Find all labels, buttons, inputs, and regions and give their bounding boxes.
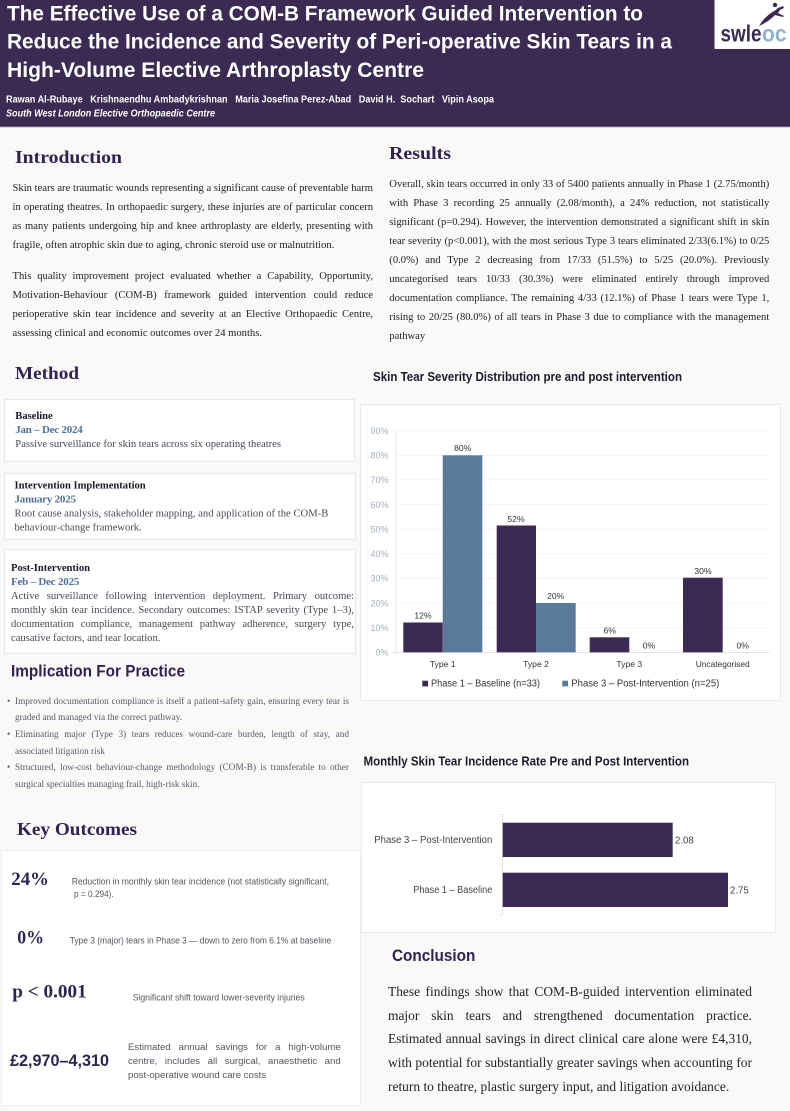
text block: introduction paragraph 2 [12,271,373,339]
legend: Phase 3 – Post-Intervention (n=25) [571,678,719,689]
category labels: Type 3 [616,659,642,669]
stat: 24% [11,869,329,899]
y axis labels: 80% [370,451,388,461]
y axis labels: 50% [370,524,388,534]
y axis labels: 60% [370,500,388,510]
panel: baseline: Passive surveillance for skin tears across six operating theatres [15,439,281,450]
stat: 24%: Reduction in monthly skin tear incidence (not statistically significant, [72,877,329,887]
chart title: monthly incidence: Monthly Skin Tear Incidence Rate Pre and Post Intervention [364,754,689,768]
stat: 0%: 0% [17,928,44,949]
affiliation: South West London Elective Orthopaedic Centre [6,108,215,120]
text block: post-intervention description: causative factors, and tear location. [11,633,160,644]
stat: p < 0.001: Significant shift toward lower-severity injuries [133,992,305,1002]
value labels: 6% [603,626,616,636]
logo: swleoc [714,0,790,49]
text block: introduction paragraph 2: This quality improvement project evaluated whether a Capability, Opportunity, [12,271,373,282]
y axis labels [370,426,388,658]
panel: intervention implementation: behaviour-change framework. [14,522,142,533]
value labels: 30% [694,566,712,576]
heading: Key Outcomes: Key Outcomes [17,819,137,839]
text block: implications list [7,696,349,790]
stat: 0%: Type 3 (major) tears in Phase 3 — down to zero from 6.1% at baseline [70,936,331,946]
text block: results: pathway [389,331,425,342]
text block: savings description [128,1042,341,1081]
text block: conclusion: These findings show that COM-B-guided intervention eliminated [388,984,752,999]
bar chart: monthly incidence: 2.08 [675,836,694,846]
panel: post-intervention [4,550,356,654]
bar chart: monthly incidence: 2.75 [730,886,749,896]
bar chart: monthly incidence: Phase 1 – Baseline [413,885,493,896]
text block: results: documentation compliance. The remaining 4/33 (12.1%) of Phase 1 tears were Type 1, [389,293,769,304]
value labels: 80% [454,443,472,453]
value labels [414,443,749,651]
text block: savings description: Estimated annual savings for a high-volume [128,1042,341,1053]
y axis labels: 70% [370,475,388,485]
text block: introduction paragraph 1: as many patients undergoing hip and knee arthroplasty are elderly, presenting with [12,221,373,232]
text block: introduction paragraph 1: fragile, often atrophic skin due to aging, chronic steroid use or malnutrition. [12,240,334,251]
text block: results [389,179,770,342]
bar chart: severity distribution [360,404,780,700]
text: • [7,696,10,706]
value labels: 20% [547,591,565,601]
text block: implications list: surgical specialties managing frail, high-risk skin. [15,780,200,790]
text block: results: significant (p=0.294). However, the intervention demonstrated a significant shift in skin [389,217,769,228]
value labels: 0% [643,641,656,651]
text block: introduction paragraph 1 [12,183,373,251]
value labels: 12% [414,611,432,621]
heading: Results: Results [389,143,451,163]
heading: Conclusion: Conclusion [392,947,475,965]
y axis labels: 0% [375,648,388,658]
stat: 0% [17,928,331,949]
value labels: 0% [736,641,749,651]
stat: savings: £2,970–4,310 [10,1051,109,1070]
text block: conclusion: return to theatre, plastic surgery input, and litigation avoidance. [388,1079,729,1094]
title: The Effective Use of a COM-B Framework Guided Intervention to [7,2,643,26]
authors: Rawan Al-Rubaye Krishnaendhu Ambadykrishnan Maria Josefina Perez-Abad David H. Sochart Vipin Asopa [6,94,494,106]
text block: post-intervention description [11,591,354,644]
stat: 24%: p = 0.294). [74,889,114,899]
text block: introduction paragraph 1: in operating theatres. In orthopaedic surgery, these injuries are of particular concern [12,202,373,213]
text block: introduction paragraph 1: Skin tears are traumatic wounds representing a significant cause of preventable harm [12,183,373,194]
text block: results: tear severity (p<0.001), with the most serious Type 3 tears eliminated 2/33(6.1%) to 0/25 [389,236,769,247]
text block: conclusion: Estimated annual savings in direct clinical care alone were £4,310, [388,1031,752,1046]
bars: phase 3 [443,455,576,652]
heading: Implication For Practice: Implication For Practice [11,662,185,681]
y axis labels: 90% [370,426,388,436]
chart title: severity distribution: Skin Tear Severity Distribution pre and post intervention [373,370,682,384]
category labels: Uncategorised [696,659,750,669]
logo: swleoc: oc [762,21,787,47]
panel: baseline [4,400,354,462]
stat: p < 0.001 [12,981,305,1002]
text block: results: with Phase 3 recording 25 annually (2.08/month), a 24% reduction, not statistically [389,198,769,209]
text block: results: rising to 20/25 (80.0%) of all tears in Phase 3 due to compliance with the management [389,312,769,323]
panel: key outcomes [2,850,360,1106]
y axis labels: 40% [370,549,388,559]
text block: implications list: Structured, low-cost behaviour-change methodology (COM-B) is transferable to other [15,763,349,773]
text block: implications list: associated litigation risk [15,747,105,757]
y axis labels: 30% [370,574,388,584]
text block: introduction paragraph 2: assessing clinical and economic outcomes over 24 months. [12,328,262,339]
legend [422,678,719,689]
text block: results: (0.0%) and Type 2 decreasing from 17/33 (51.5%) to 5/25 (20.0%). Previously [389,255,769,266]
panel: intervention implementation: January 2025 [14,493,76,505]
panel: baseline: Jan – Dec 2024 [15,424,83,436]
text block: implications list: Eliminating major (Type 3) tears reduces wound-care burden, length of stay, and [15,730,349,740]
text block: conclusion: major skin tears and strengthened documentation practice. [388,1008,752,1023]
text block: introduction paragraph 2: Motivation-Behaviour (COM-B) framework guided intervention could reduce [12,290,373,301]
title: Reduce the Incidence and Severity of Peri-operative Skin Tears in a [7,30,672,54]
panel: post-intervention: Feb – Dec 2025 [11,576,80,588]
text block: conclusion [388,984,752,1094]
legend: Phase 1 – Baseline (n=33) [431,678,540,689]
text block: post-intervention description: monthly skin tear incidence. Secondary outcomes: ISTAP severity (Type 1–3), [11,605,354,616]
text block: post-intervention description: documentation compliance, management pathway adherence, surgery type, [11,619,354,630]
text block: savings description: centre, includes all surgical, anaesthetic and [128,1056,341,1067]
text block: results: uncategorised tears 10/33 (30.3%) were eliminated entirely through improved [389,274,769,285]
text: • [7,763,10,773]
value labels: 52% [507,514,525,524]
title [7,2,672,82]
stat: 24%: 24% [11,869,49,890]
bar chart: monthly incidence [362,782,776,932]
text: • [7,730,10,740]
category labels: Type 1 [430,659,456,669]
text block: results: Overall, skin tears occurred in only 33 of 5400 patients annually in Phase 1 (2.75/month) [389,179,769,190]
bar chart: monthly incidence: Phase 3 – Post-Intervention [374,835,492,846]
y axis labels: 10% [370,623,388,633]
logo: swleoc: swle [720,21,762,47]
y axis labels: 20% [370,598,388,608]
header banner [0,0,790,128]
stat: p < 0.001: p < 0.001 [12,981,87,1002]
text block: conclusion: with potential for substantially greater savings when accounting for [388,1055,752,1070]
panel: intervention implementation: Intervention Implementation [14,480,146,491]
panel: intervention implementation [4,474,356,540]
bars: phase 1 [403,526,723,652]
panel: baseline: Baseline [15,411,53,422]
text block: savings description: post-operative wound care costs [128,1070,266,1081]
panel: intervention implementation: Root cause analysis, stakeholder mapping, and application of the COM-B [14,508,328,519]
panel: post-intervention: Post-Intervention [11,563,90,574]
title: High-Volume Elective Arthroplasty Centre [7,59,424,82]
heading: Introduction: Introduction [15,147,122,167]
text block: implications list: Improved documentation compliance is itself a patient-safety gain, ensuring every tear is [15,696,349,706]
text block: introduction paragraph 2: perioperative skin tear incidence and severity at an Elective Orthopaedic Centre, [12,309,373,320]
category labels: Type 2 [523,659,549,669]
category labels [430,659,750,669]
heading: Method: Method [15,363,79,383]
text block: post-intervention description: Active surveillance following intervention deployment. Primary outcome: [11,591,354,602]
text block: implications list: graded and managed via the correct pathway. [15,713,182,723]
